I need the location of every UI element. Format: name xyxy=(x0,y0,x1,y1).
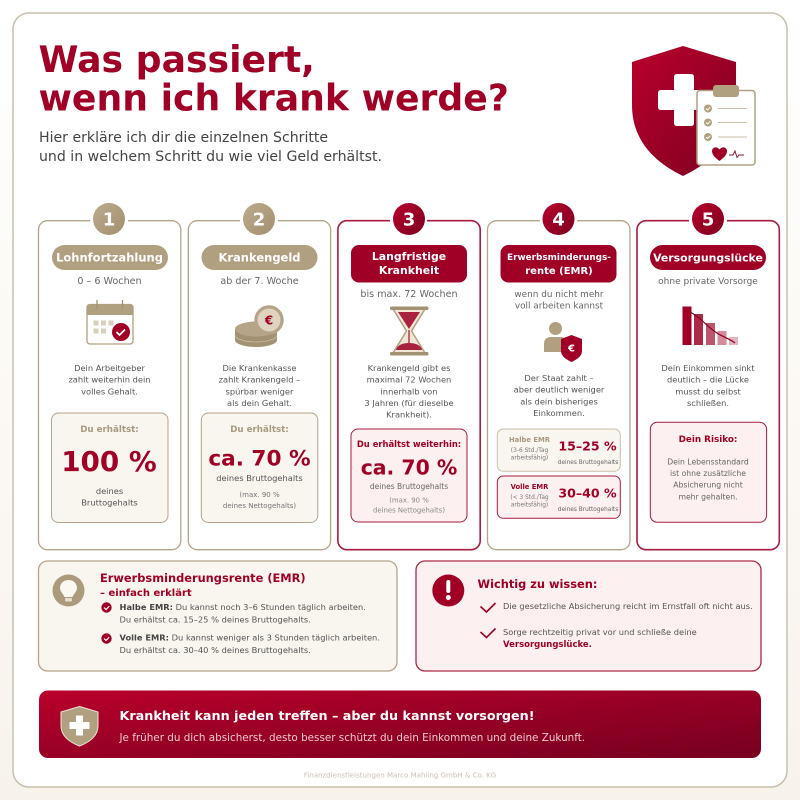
step number 3: 3 xyxy=(403,210,415,230)
description: musst du selbst xyxy=(675,386,742,396)
half EMR box: (3-6 Std./Tag xyxy=(511,448,548,454)
subtitle: und in welchem Schritt du wie viel Geld erhältst. xyxy=(39,149,382,165)
result box: deines Nettogehalts) xyxy=(223,502,296,510)
risk box xyxy=(650,422,767,522)
full EMR box: deines Bruttogehalts xyxy=(558,507,618,513)
heading box: rente (EMR) xyxy=(525,266,593,277)
condition: ohne private Vorsorge xyxy=(658,277,758,287)
description: Krankengeld gibt es xyxy=(368,363,450,373)
result box: deines Bruttogehalts xyxy=(216,473,303,483)
description xyxy=(219,363,300,408)
result box: (max. 90 % xyxy=(389,497,429,505)
banner text: Je früher du dich absicherst, desto besser schützt du dein Einkommen und deine Zukunft. xyxy=(118,732,585,744)
full EMR box: arbeitsfähig) xyxy=(511,502,548,508)
half EMR item: Du erhältst ca. 15–25 % deines Bruttogehalts. xyxy=(120,614,311,624)
heading pill: Lohnfortzahlung xyxy=(56,250,163,264)
title xyxy=(38,38,509,120)
item two: Versorgungslücke. xyxy=(503,640,592,650)
result box: deines xyxy=(96,486,123,496)
step number 4 xyxy=(542,203,574,235)
item two: Sorge rechtzeitig privat vor und schließe deine xyxy=(503,627,697,637)
heading box: Krankheit xyxy=(379,264,439,277)
description xyxy=(661,363,755,408)
heading pill xyxy=(202,245,318,270)
half EMR box: deines Bruttogehalts xyxy=(558,460,618,466)
step number 5: 5 xyxy=(702,210,714,230)
subtitle: Hier erkläre ich dir die einzelnen Schritte xyxy=(39,130,328,146)
description: Dein Arbeitgeber xyxy=(74,363,146,373)
full EMR box: 30–40 % xyxy=(558,486,617,500)
icon: falling income bars xyxy=(682,306,738,345)
result box xyxy=(201,413,318,522)
half EMR item xyxy=(101,602,366,624)
description: volles Gehalt. xyxy=(81,386,138,396)
risk box: mehr gehalten. xyxy=(678,492,738,501)
result box: ca. 70 % xyxy=(208,446,311,472)
description: 3 Jahren (für dieselbe xyxy=(364,398,454,408)
description xyxy=(68,363,151,396)
result box: deines Nettogehalts) xyxy=(373,506,445,514)
description: spürbar weniger xyxy=(226,386,294,396)
item two xyxy=(480,627,697,650)
result box: (max. 90 % xyxy=(239,491,280,499)
heading pill: Versorgungslücke xyxy=(653,252,763,264)
step number 5 xyxy=(692,203,724,235)
half EMR box: Halbe EMR xyxy=(509,436,551,444)
description: innerhalb von xyxy=(380,386,438,396)
description: zahlt weiterhin dein xyxy=(68,375,151,385)
EMR heading xyxy=(100,571,306,599)
heading box xyxy=(500,245,616,282)
risk box: Dein Lebensstandard xyxy=(667,458,749,466)
duration: 0 – 6 Wochen xyxy=(77,276,142,287)
risk box: Absicherung nicht xyxy=(673,481,743,490)
result box: ca. 70 % xyxy=(361,456,457,480)
panel: step 3 xyxy=(338,203,480,550)
icon: hourglass xyxy=(390,306,428,356)
icon: person with euro shield xyxy=(544,322,582,362)
description: Krankheit). xyxy=(386,410,432,420)
description: zahlt Krankengeld – xyxy=(219,375,300,385)
icon: small shield xyxy=(61,706,98,746)
step number 1 xyxy=(93,203,125,235)
heading box: Erwerbsminderungs- xyxy=(507,253,611,263)
half EMR item: Halbe EMR: Du kannst noch 3–6 Stunden täglich arbeiten. xyxy=(120,602,366,612)
panel: step 2 xyxy=(188,203,331,550)
icon: coins xyxy=(235,305,284,347)
heading pill: Krankengeld xyxy=(218,250,301,264)
duration: ab der 7. Woche xyxy=(220,276,299,287)
icon: shield with clipboard xyxy=(632,46,755,176)
half EMR box: 15–25 % xyxy=(558,438,617,454)
step number 3 xyxy=(393,203,425,235)
result box: Du erhältst: xyxy=(80,425,139,435)
full EMR box: Volle EMR xyxy=(511,483,549,491)
step number 2: 2 xyxy=(253,210,265,230)
banner xyxy=(39,690,761,758)
EMR heading: Erwerbsminderungsrente (EMR) xyxy=(100,571,306,585)
panel: step 4 xyxy=(488,203,630,550)
heading box: Langfristige xyxy=(372,250,446,263)
result box: deines Bruttogehalts xyxy=(370,482,448,491)
full EMR item: Volle EMR: Du kannst weniger als 3 Stunden täglich arbeiten. xyxy=(120,632,380,642)
icon: light bulb xyxy=(52,574,84,606)
risk box: Dein Risiko: xyxy=(679,435,737,445)
step number 4: 4 xyxy=(552,210,565,230)
half EMR box xyxy=(497,429,620,471)
description: maximal 72 Wochen xyxy=(367,375,451,385)
result box: Du erhältst: xyxy=(230,425,289,435)
icon: coins: € xyxy=(264,314,273,328)
panel: step 1 xyxy=(38,203,181,550)
EMR heading: – einfach erklärt xyxy=(100,588,192,599)
heading pill xyxy=(650,245,766,270)
duration: bis max. 72 Wochen xyxy=(360,289,458,300)
icon: calendar xyxy=(87,300,133,344)
step number 1: 1 xyxy=(103,210,115,230)
full EMR item: Du erhältst ca. 30–40 % deines Bruttogehalts. xyxy=(120,645,311,655)
result box: Bruttogehalts xyxy=(81,498,138,508)
description: Dein Einkommen sinkt xyxy=(661,363,755,373)
full EMR box: (< 3 Std./Tag xyxy=(510,495,549,501)
description: schließen. xyxy=(687,398,729,408)
result box xyxy=(351,429,467,522)
icon: person with euro shield: € xyxy=(567,344,575,354)
heading box xyxy=(351,245,467,282)
item one: Die gesetzliche Absicherung reicht im Ernstfall oft nicht aus. xyxy=(503,601,753,611)
condition: voll arbeiten kannst xyxy=(515,302,604,312)
step number 2 xyxy=(243,203,275,235)
condition xyxy=(514,290,604,312)
icon: exclamation mark xyxy=(432,574,464,606)
full EMR box xyxy=(497,476,620,518)
condition: wenn du nicht mehr xyxy=(514,290,604,300)
title: wenn ich krank werde? xyxy=(38,76,509,120)
description: als dein bisheriges xyxy=(520,396,598,406)
title: Was passiert, xyxy=(38,38,315,81)
description: Der Staat zahlt – xyxy=(524,373,594,383)
description xyxy=(364,363,454,420)
important heading: Wichtig zu wissen: xyxy=(478,577,597,591)
banner heading: Krankheit kann jeden treffen – aber du kannst vorsorgen! xyxy=(120,709,535,724)
result box: Du erhältst weiterhin: xyxy=(357,439,461,449)
description: Einkommen. xyxy=(533,408,585,418)
panel: important to know xyxy=(416,561,761,671)
heading pill xyxy=(52,245,168,270)
risk box: ist ohne zusätzliche xyxy=(670,469,746,478)
subtitle xyxy=(39,130,382,165)
description xyxy=(514,373,605,418)
description: aber deutlich weniger xyxy=(514,385,605,395)
description: Die Krankenkasse xyxy=(222,363,296,373)
description: deutlich – die Lücke xyxy=(667,375,749,385)
footer: Finanzdienstleistungen Marco Mahling GmbH & Co. KG xyxy=(304,770,496,780)
half EMR box: arbeitsfähig) xyxy=(511,456,548,462)
result box xyxy=(52,413,168,522)
result box: 100 % xyxy=(61,445,157,478)
panel: step 5 xyxy=(637,203,779,550)
panel: EMR explained xyxy=(38,561,397,671)
full EMR item xyxy=(101,632,380,655)
description: als dein Gehalt. xyxy=(227,398,292,408)
